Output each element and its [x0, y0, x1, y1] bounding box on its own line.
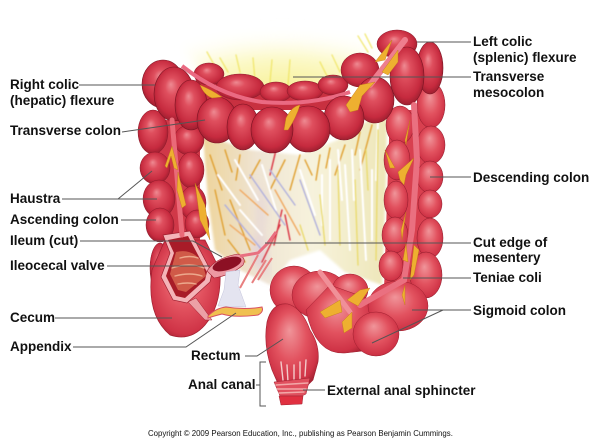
label: External anal sphincter: External anal sphincter — [327, 383, 476, 398]
label: Cut edge of mesentery — [265, 235, 548, 265]
label: Transverse colon — [10, 120, 205, 138]
label: Right colic (hepatic) flexure: (hepatic) flexure — [10, 93, 115, 108]
transverse colon front row — [142, 42, 443, 153]
copyright: Copyright © 2009 Pearson Education, Inc., publishing as Pearson Benjamin Cummings. — [148, 429, 453, 438]
label: Anal canal — [188, 362, 266, 406]
label: Cut edge of mesentery: Cut edge of — [473, 235, 548, 250]
taenia over transverse colon — [182, 66, 350, 103]
label: Left colic (splenic) flexure — [417, 34, 577, 65]
label: Teniae coli: Teniae coli — [473, 270, 542, 285]
label: Left colic (splenic) flexure: Left colic — [473, 34, 533, 49]
label: Ascending colon: Ascending colon — [10, 212, 119, 227]
ileocecal valve — [207, 232, 276, 278]
label: Transverse mesocolon — [293, 69, 545, 100]
label: Ileum (cut) — [10, 233, 222, 257]
label: Cut edge of mesentery: mesentery — [473, 250, 541, 265]
taeniae coli bands — [172, 40, 417, 312]
label: Cecum: Cecum — [10, 310, 55, 325]
upper mesocolon glow — [180, 15, 385, 95]
cecum — [150, 240, 220, 337]
rectum — [266, 304, 318, 386]
label: Transverse colon: Transverse colon — [10, 123, 121, 138]
transverse colon back row — [194, 30, 417, 110]
appendix — [208, 307, 262, 318]
label: Appendix: Appendix — [10, 339, 72, 354]
label: Right colic (hepatic) flexure: Right colic — [10, 77, 79, 92]
label: Left colic (splenic) flexure: (splenic) flexure — [473, 50, 577, 65]
label: Ileum (cut): Ileum (cut) — [10, 233, 78, 248]
label: Rectum — [191, 339, 283, 363]
illustration: large intestine — [138, 15, 445, 405]
mesoappendix — [218, 270, 246, 307]
label: Descending colon: Descending colon — [473, 170, 589, 185]
mesentery — [203, 105, 387, 288]
label: Sigmoid colon: Sigmoid colon — [473, 303, 566, 318]
label: Transverse mesocolon: Transverse — [473, 69, 545, 84]
label: Haustra — [10, 171, 157, 206]
label: Sigmoid colon — [372, 303, 566, 343]
ascending colon underlay and segments — [138, 110, 209, 242]
label: Ileocecal valve: Ileocecal valve — [10, 258, 105, 273]
label: Appendix — [10, 313, 236, 354]
anal canal with external sphincter — [274, 378, 310, 405]
descending colon underlay and segments — [379, 82, 445, 298]
label: Anal canal: Anal canal — [188, 377, 256, 392]
label: Rectum: Rectum — [191, 348, 241, 363]
label: Teniae coli — [403, 270, 542, 285]
sigmoid colon — [270, 266, 428, 356]
label: Right colic (hepatic) flexure — [10, 77, 155, 108]
fatty appendages — [165, 40, 419, 333]
ileum cut and opening — [161, 231, 212, 303]
label: Haustra: Haustra — [10, 191, 61, 206]
label: Transverse mesocolon: mesocolon — [473, 85, 544, 100]
